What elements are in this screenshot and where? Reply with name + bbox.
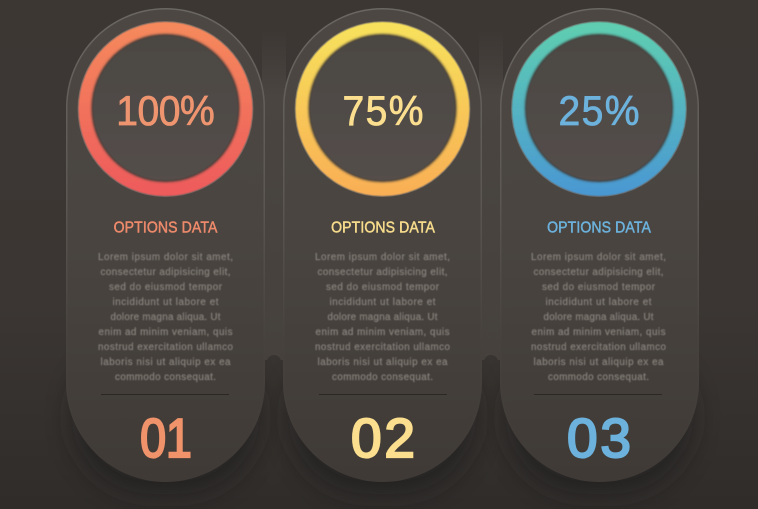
body text 1: Lorem ipsum dolor sit amet,	[98, 252, 233, 263]
body text 1	[98, 252, 234, 383]
body text 3: Lorem ipsum dolor sit amet,	[531, 252, 666, 263]
body text 1: incididunt ut labore et	[112, 297, 219, 308]
body text 1: nostrud exercitation ullamco	[98, 342, 234, 353]
panel: option 1	[66, 8, 265, 494]
panel 2 shadow	[289, 340, 476, 494]
panel 2 body	[283, 8, 482, 482]
ring 1	[78, 21, 254, 197]
divider 1	[101, 394, 229, 395]
body text 2: Lorem ipsum dolor sit amet,	[315, 252, 450, 263]
body text 1: laboris nisi ut aliquip ex ea	[100, 357, 231, 368]
body text 3: laboris nisi ut aliquip ex ea	[534, 357, 664, 368]
body text 2: incididunt ut labore et	[330, 297, 436, 308]
divider 3	[534, 394, 662, 395]
body text 1: consectetur adipisicing elit,	[100, 267, 230, 278]
panel 3 shadow	[506, 340, 693, 494]
number 1: 01	[140, 407, 192, 469]
body text 3: enim ad minim veniam, quis	[532, 327, 666, 338]
body text 2: commodo consequat.	[332, 372, 433, 383]
body text 3: incididunt ut labore et	[546, 297, 652, 308]
number 2: 02	[351, 407, 415, 469]
body text 2: dolore magna aliqua. Ut	[328, 312, 438, 323]
body text 1: sed do eiusmod tempor	[109, 282, 223, 293]
body text 3: nostrud exercitation ullamco	[531, 342, 667, 353]
heading 3: OPTIONS DATA	[547, 219, 652, 237]
percentage 1: 100%	[116, 87, 215, 134]
body text 3: consectetur adipisicing elit,	[534, 267, 664, 278]
heading 1: OPTIONS DATA	[114, 219, 218, 237]
body text 1: enim ad minim veniam, quis	[98, 327, 233, 338]
ring 2	[294, 21, 470, 197]
percentage 2: 75%	[343, 87, 423, 134]
number 3: 03	[567, 407, 631, 469]
decorative groove: lower left	[267, 355, 281, 485]
body text 2: sed do eiusmod tempor	[326, 282, 440, 293]
panel 1 body	[66, 8, 265, 482]
body text 3: commodo consequat.	[548, 372, 649, 383]
decorative groove: upper left	[262, 30, 286, 360]
panel: option 3	[500, 8, 699, 494]
body text 2: enim ad minim veniam, quis	[316, 327, 450, 338]
body text 3: dolore magna aliqua. Ut	[544, 312, 654, 323]
body text 3	[531, 252, 667, 383]
body text 1: dolore magna aliqua. Ut	[110, 312, 221, 323]
body text 3: sed do eiusmod tempor	[542, 282, 656, 293]
panel: option 2	[283, 8, 482, 494]
decorative groove: upper right	[479, 30, 503, 360]
body text 2: nostrud exercitation ullamco	[315, 342, 451, 353]
heading 2: OPTIONS DATA	[331, 219, 436, 237]
ring 3	[511, 21, 687, 197]
body text 2: laboris nisi ut aliquip ex ea	[318, 357, 448, 368]
percentage 3: 25%	[559, 87, 639, 134]
panel 3 body	[500, 8, 699, 482]
decorative groove: lower right	[484, 355, 498, 485]
body text 2	[315, 252, 451, 383]
body text 1: commodo consequat.	[115, 372, 216, 383]
body text 2: consectetur adipisicing elit,	[318, 267, 448, 278]
panel 1 shadow	[72, 340, 259, 494]
divider 2	[319, 394, 447, 395]
